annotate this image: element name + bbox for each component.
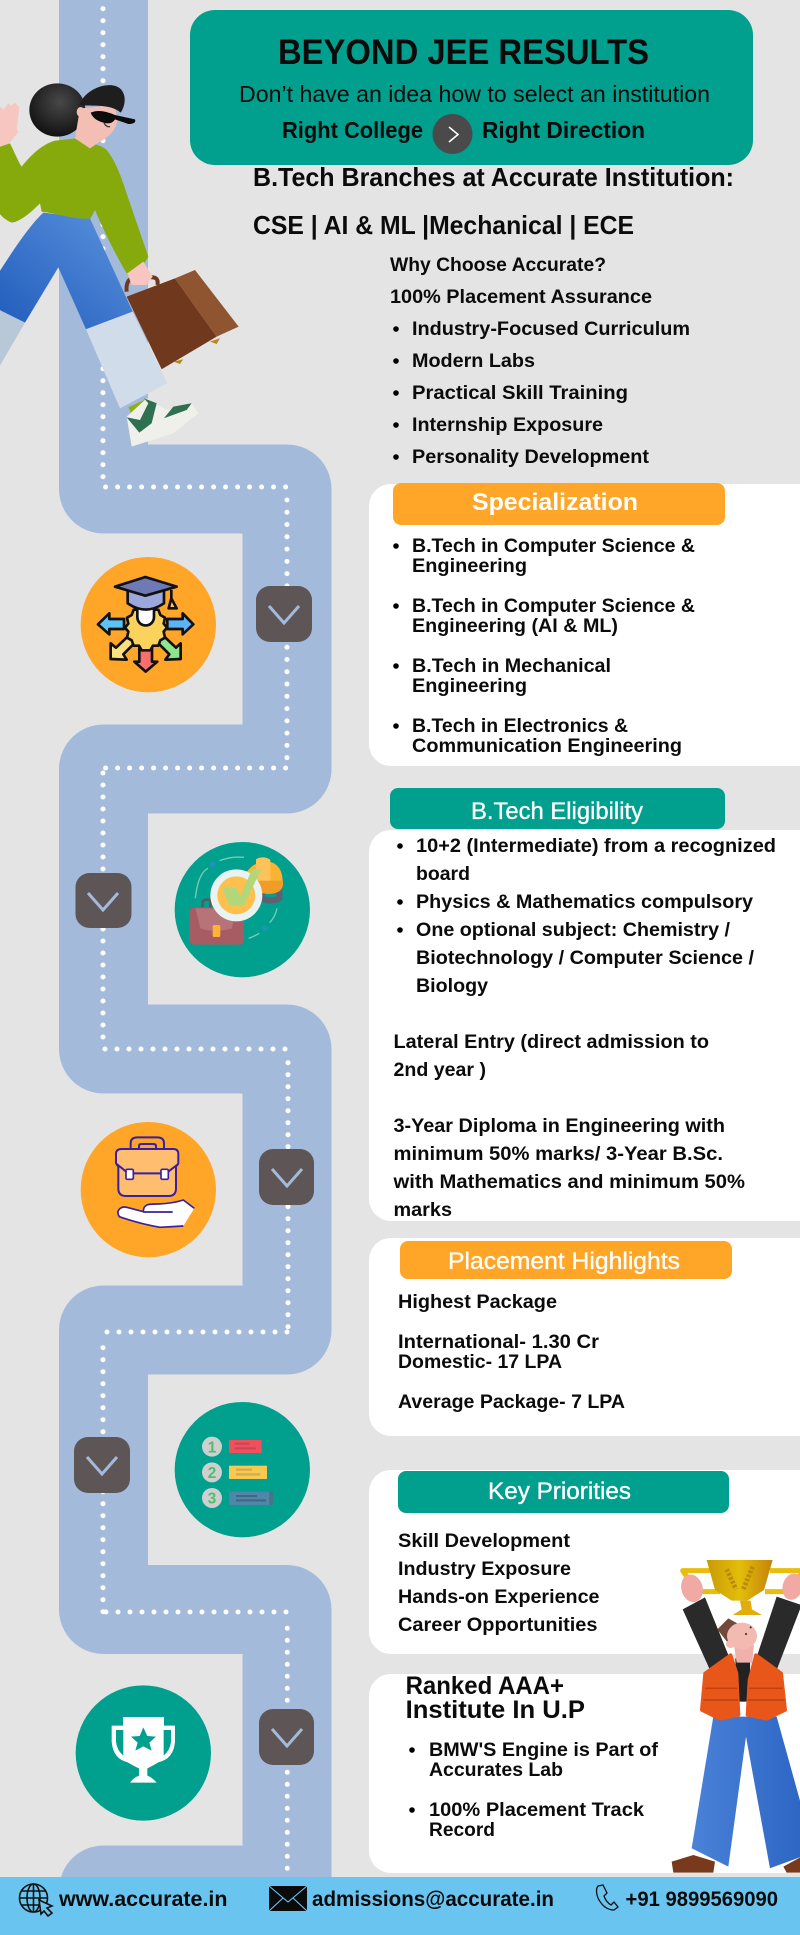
- illustration: man raising trophy: [672, 1560, 800, 1873]
- branch list: Communication Engineering: [412, 736, 682, 757]
- title: BEYOND JEE RESULTS: [278, 33, 649, 72]
- ranking heading: Institute In U.P: [406, 1696, 585, 1724]
- branch list: B.Tech in Mechanical: [412, 656, 611, 677]
- icon: globe: [20, 1884, 52, 1916]
- arms: [683, 1597, 800, 1670]
- illustration: woman walking with briefcase: [0, 83, 239, 447]
- why choose accurate list: Why Choose Accurate?: [390, 255, 606, 276]
- branch list: [393, 536, 695, 757]
- heading: specialization: Specialization: [472, 489, 638, 516]
- panel: eligibility: [369, 788, 800, 1221]
- eligibility bullets: Biology: [416, 976, 488, 997]
- left hand: [0, 103, 19, 147]
- heading: specialization: [393, 483, 725, 525]
- heading: eligibility: [390, 788, 725, 829]
- vest: [702, 1655, 785, 1719]
- why choose accurate list: Industry-Focused Curriculum: [412, 319, 690, 340]
- panel: ranking: [369, 1672, 800, 1873]
- branch list: Engineering (AI & ML): [412, 616, 618, 637]
- package figures: Domestic- 17 LPA: [398, 1352, 562, 1373]
- phone number: +91 9899569090: [626, 1888, 778, 1911]
- icon: numbered list: 1: [208, 1439, 217, 1456]
- priority list: Industry Exposure: [398, 1559, 571, 1580]
- why choose accurate list: Modern Labs: [412, 351, 535, 372]
- priority list: Hands-on Experience: [398, 1587, 600, 1608]
- lateral entry text: with Mathematics and minimum 50%: [392, 1172, 745, 1193]
- shoe: [127, 398, 198, 447]
- icon: numbered list: 2: [208, 1465, 216, 1482]
- why choose accurate list: Practical Skill Training: [412, 383, 628, 404]
- trousers: [692, 1717, 800, 1868]
- chevron marker 2: [76, 873, 132, 928]
- priority list: Skill Development: [398, 1531, 571, 1552]
- eligibility bullets: Biotechnology / Computer Science /: [416, 948, 755, 969]
- chevron marker 3: [259, 1149, 314, 1205]
- email: admissions@accurate.in: [312, 1888, 554, 1911]
- why choose accurate list: 100% Placement Assurance: [390, 287, 652, 308]
- chevron marker 1: [256, 586, 312, 642]
- package figures: Average Package- 7 LPA: [398, 1392, 625, 1413]
- heading: placement highlights: Placement Highlights: [448, 1248, 680, 1275]
- website: www.accurate.in: [58, 1888, 228, 1911]
- lateral entry text: [392, 1032, 745, 1221]
- ranking bullets: [409, 1740, 659, 1841]
- ranking bullets: 100% Placement Track: [429, 1800, 644, 1821]
- why choose accurate list: Internship Exposure: [412, 415, 603, 436]
- chevron marker 4: [74, 1437, 130, 1493]
- head: [29, 83, 135, 148]
- branches heading: [253, 162, 734, 240]
- heading: eligibility: B.Tech Eligibility: [471, 798, 643, 825]
- branch list: Engineering: [412, 556, 527, 577]
- trophy handles: [683, 1571, 800, 1592]
- package figures: Highest Package: [398, 1292, 557, 1313]
- icon: graduation cap with arrows: [81, 557, 216, 692]
- lateral entry text: marks: [394, 1200, 452, 1221]
- ranking bullets: Accurates Lab: [429, 1760, 563, 1781]
- lateral entry text: 3-Year Diploma in Engineering with: [394, 1116, 725, 1137]
- hands: [678, 1571, 800, 1605]
- eligibility bullets: Physics & Mathematics compulsory: [416, 892, 753, 913]
- panel: specialization: [369, 483, 800, 766]
- ranking bullets: BMW'S Engine is Part of: [429, 1740, 659, 1761]
- briefcase: [127, 270, 239, 369]
- icon: arrow button: [432, 114, 472, 154]
- panel: key priorities: [369, 1470, 800, 1654]
- icon: briefcase in hand: [81, 1122, 216, 1257]
- tagline right: Right Direction: [482, 117, 645, 143]
- panel: placement highlights: [369, 1238, 800, 1436]
- winding road path: [103, 0, 288, 1935]
- package figures: International- 1.30 Cr: [398, 1332, 600, 1353]
- shoes: [672, 1855, 800, 1873]
- branches heading: B.Tech Branches at Accurate Institution:: [253, 162, 734, 192]
- heading: placement highlights: [400, 1241, 732, 1279]
- package figures: [398, 1292, 625, 1413]
- eligibility bullets: [397, 836, 776, 997]
- lateral entry text: 2nd year ): [394, 1060, 486, 1081]
- trophy cup: [707, 1560, 773, 1615]
- heading: key priorities: [398, 1471, 729, 1513]
- lateral entry text: Lateral Entry (direct admission to: [394, 1032, 709, 1053]
- icon: trophy with star: [76, 1685, 211, 1821]
- branch list: B.Tech in Computer Science &: [412, 536, 695, 557]
- icon: checkmark with briefcase and helmet: [175, 842, 310, 977]
- branch list: Engineering: [412, 676, 527, 697]
- right hand: [127, 262, 153, 285]
- sweater: [0, 138, 148, 273]
- eligibility bullets: board: [416, 864, 470, 885]
- title banner: [190, 10, 753, 165]
- lateral entry text: minimum 50% marks/ 3-Year B.Sc.: [394, 1144, 723, 1165]
- eligibility bullets: 10+2 (Intermediate) from a recognized: [416, 836, 776, 857]
- ranking heading: Ranked AAA+: [406, 1672, 564, 1700]
- tagline left: Right College: [282, 117, 423, 143]
- ranking bullets: Record: [429, 1820, 495, 1841]
- footer contact bar: [0, 1877, 800, 1935]
- icon: envelope: [269, 1886, 307, 1911]
- ranking heading: [406, 1672, 585, 1724]
- branch list: B.Tech in Electronics &: [412, 716, 628, 737]
- priority list: [398, 1531, 600, 1636]
- icon: numbered list: 3: [208, 1491, 216, 1508]
- heading: key priorities: Key Priorities: [488, 1478, 631, 1505]
- eligibility bullets: One optional subject: Chemistry /: [416, 920, 731, 941]
- priority list: Career Opportunities: [398, 1615, 598, 1636]
- icon: numbered list: [175, 1402, 310, 1537]
- shirt and head: [717, 1618, 757, 1702]
- trousers: [0, 213, 167, 408]
- chevron marker 5: [259, 1709, 314, 1765]
- icon: phone: [596, 1885, 618, 1910]
- branch list: B.Tech in Computer Science &: [412, 596, 695, 617]
- why choose accurate list: [390, 255, 690, 468]
- why choose accurate list: Personality Development: [412, 447, 650, 468]
- branches heading: CSE | AI & ML |Mechanical | ECE: [253, 210, 634, 240]
- subtitle: Don’t have an idea how to select an institution: [239, 81, 710, 107]
